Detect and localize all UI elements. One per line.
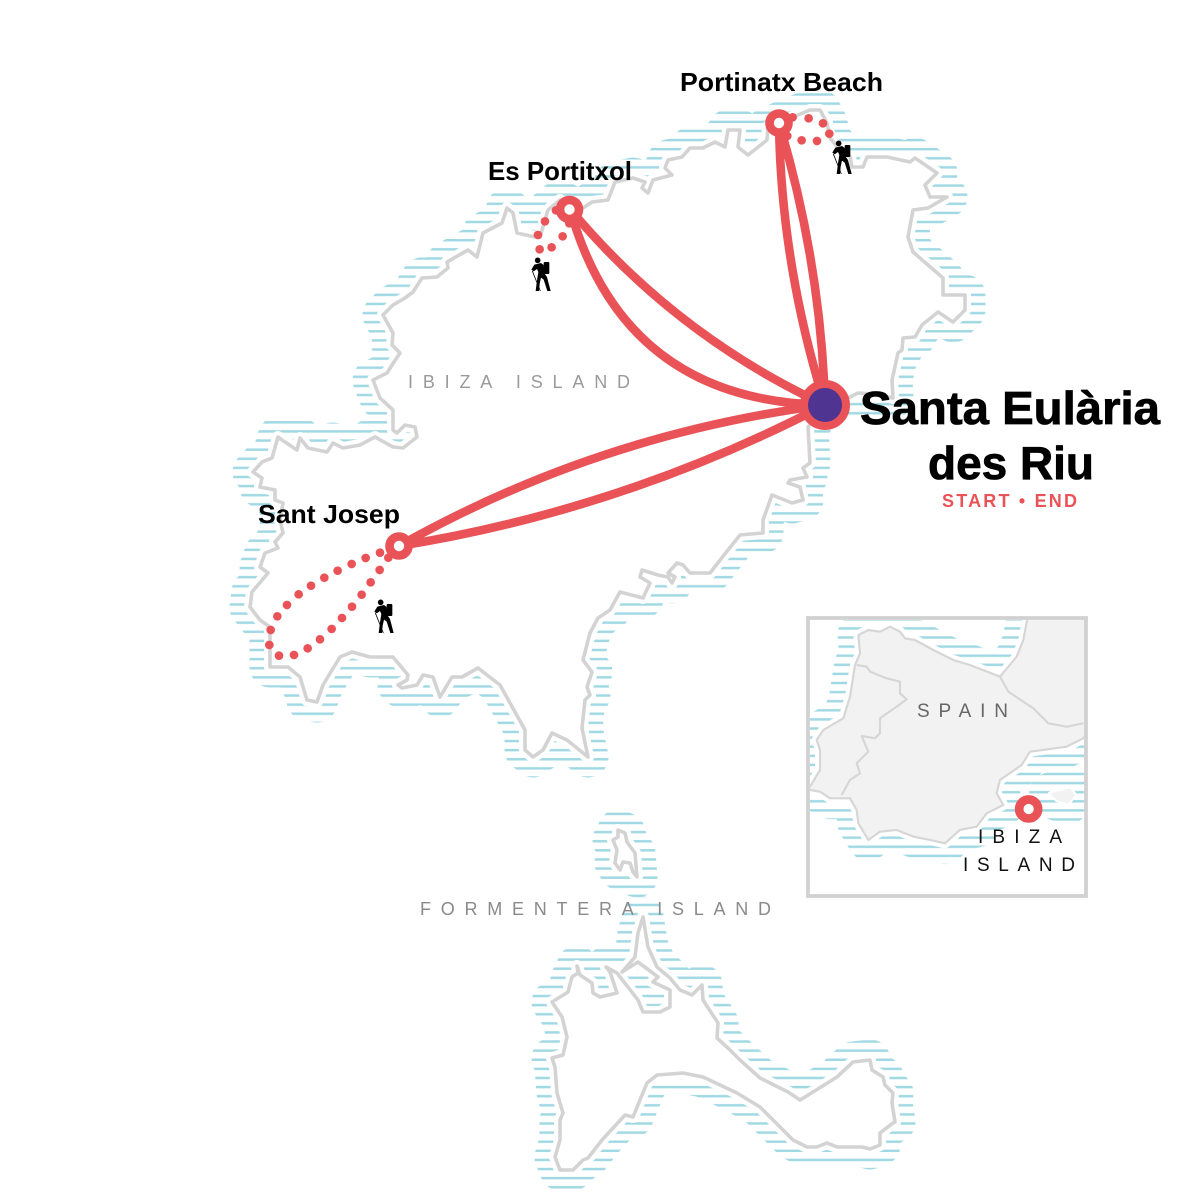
marker: Es Portitxol	[560, 200, 579, 219]
label: Es Portitxol: Es Portitxol	[488, 156, 632, 186]
icon: hiker near Portinatx	[832, 140, 852, 174]
icon: hiker near Sant Josep	[374, 599, 394, 633]
label: Santa Eulària des Riu: des Riu	[928, 437, 1094, 489]
label: Santa Eulària des Riu	[860, 382, 1160, 489]
water: coastal hatching	[250, 110, 965, 1170]
dotted hiking loop: Sant Josep	[265, 548, 393, 660]
inset label: Ibiza Island: IBIZA	[978, 827, 1062, 848]
inset label: Ibiza Island: ISLAND	[963, 855, 1075, 876]
map: Formentera island	[552, 917, 895, 1170]
marker: Portinatx Beach	[770, 114, 788, 132]
label: Sant Josep: Sant Josep	[258, 499, 400, 529]
inset frame	[808, 618, 1086, 896]
routes: driving curves between stops	[399, 123, 825, 546]
icon: hiker near Es Portitxol	[531, 257, 551, 291]
marker: Sant Josep	[390, 536, 408, 556]
label: Portinatx Beach: Portinatx Beach	[680, 67, 883, 97]
label: Santa Eulària des Riu: Santa Eulària	[860, 382, 1160, 434]
map: Espalmador islet	[613, 830, 637, 877]
label: Formentera Island: FORMENTERA ISLAND	[420, 899, 771, 919]
label: start and end: START • END	[942, 491, 1077, 511]
inset map: Spain locator	[803, 613, 1093, 896]
marker: Santa Eulària start and end	[804, 384, 846, 426]
inset marker: Ibiza	[1019, 799, 1038, 818]
inset water hatching	[803, 613, 1093, 843]
inset label: Spain: SPAIN	[917, 701, 1008, 722]
inset land borders	[842, 665, 1083, 795]
dotted hiking loop: Portinatx Beach	[783, 113, 834, 145]
inset land: Iberia and France	[803, 613, 1093, 843]
inset Mallorca	[1050, 788, 1075, 803]
inset label: Ibiza Island	[963, 827, 1075, 876]
dotted hiking loop: Es Portitxol	[534, 206, 574, 254]
inset coastline and borders	[803, 613, 1093, 843]
map: Ibiza island	[250, 110, 965, 757]
label: Ibiza Island: IBIZA ISLAND	[408, 372, 630, 392]
